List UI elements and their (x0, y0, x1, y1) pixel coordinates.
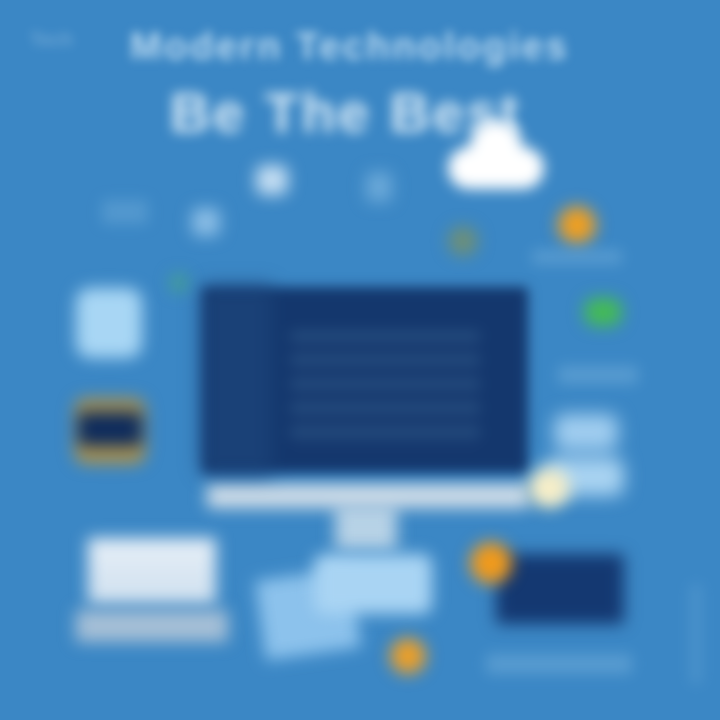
label: right vertical strip (690, 584, 702, 684)
icon: small light square (256, 165, 288, 195)
icon: light-blue tile (76, 288, 142, 358)
icon: orange circle centre (470, 542, 512, 584)
icon: orange circle top right (558, 206, 596, 244)
label: left faint (102, 200, 148, 224)
monitor screen (202, 287, 528, 473)
icon: small outline glyph (366, 172, 392, 202)
front document (314, 554, 432, 614)
icon: small green dot (170, 274, 188, 292)
monitor (190, 274, 537, 557)
small header label: Tech (30, 30, 73, 51)
monitor bezel (207, 484, 529, 508)
icon: orange circle bottom (390, 638, 426, 674)
icon: dark chip with gold border (74, 398, 146, 464)
label: bottom right caption (486, 654, 632, 674)
laptop base (76, 610, 228, 642)
dark panel bottom right (496, 554, 624, 624)
back document (255, 568, 361, 660)
title line: Modern Technologies (130, 26, 569, 68)
icon: stacked light panels right (534, 402, 636, 508)
documents cluster (247, 543, 443, 668)
monitor stand (335, 505, 397, 550)
icon: grey-green badge (448, 226, 478, 256)
label: below orange circle (532, 250, 622, 264)
icon: green badge (584, 298, 622, 326)
icon: small tile (192, 208, 220, 236)
icon: cream circle (528, 468, 570, 508)
laptop screen (88, 538, 216, 604)
screen sidebar (202, 287, 272, 473)
label: right (558, 366, 638, 384)
screen text lines (290, 332, 480, 452)
laptop (65, 526, 239, 653)
icon: cloud (438, 110, 554, 200)
